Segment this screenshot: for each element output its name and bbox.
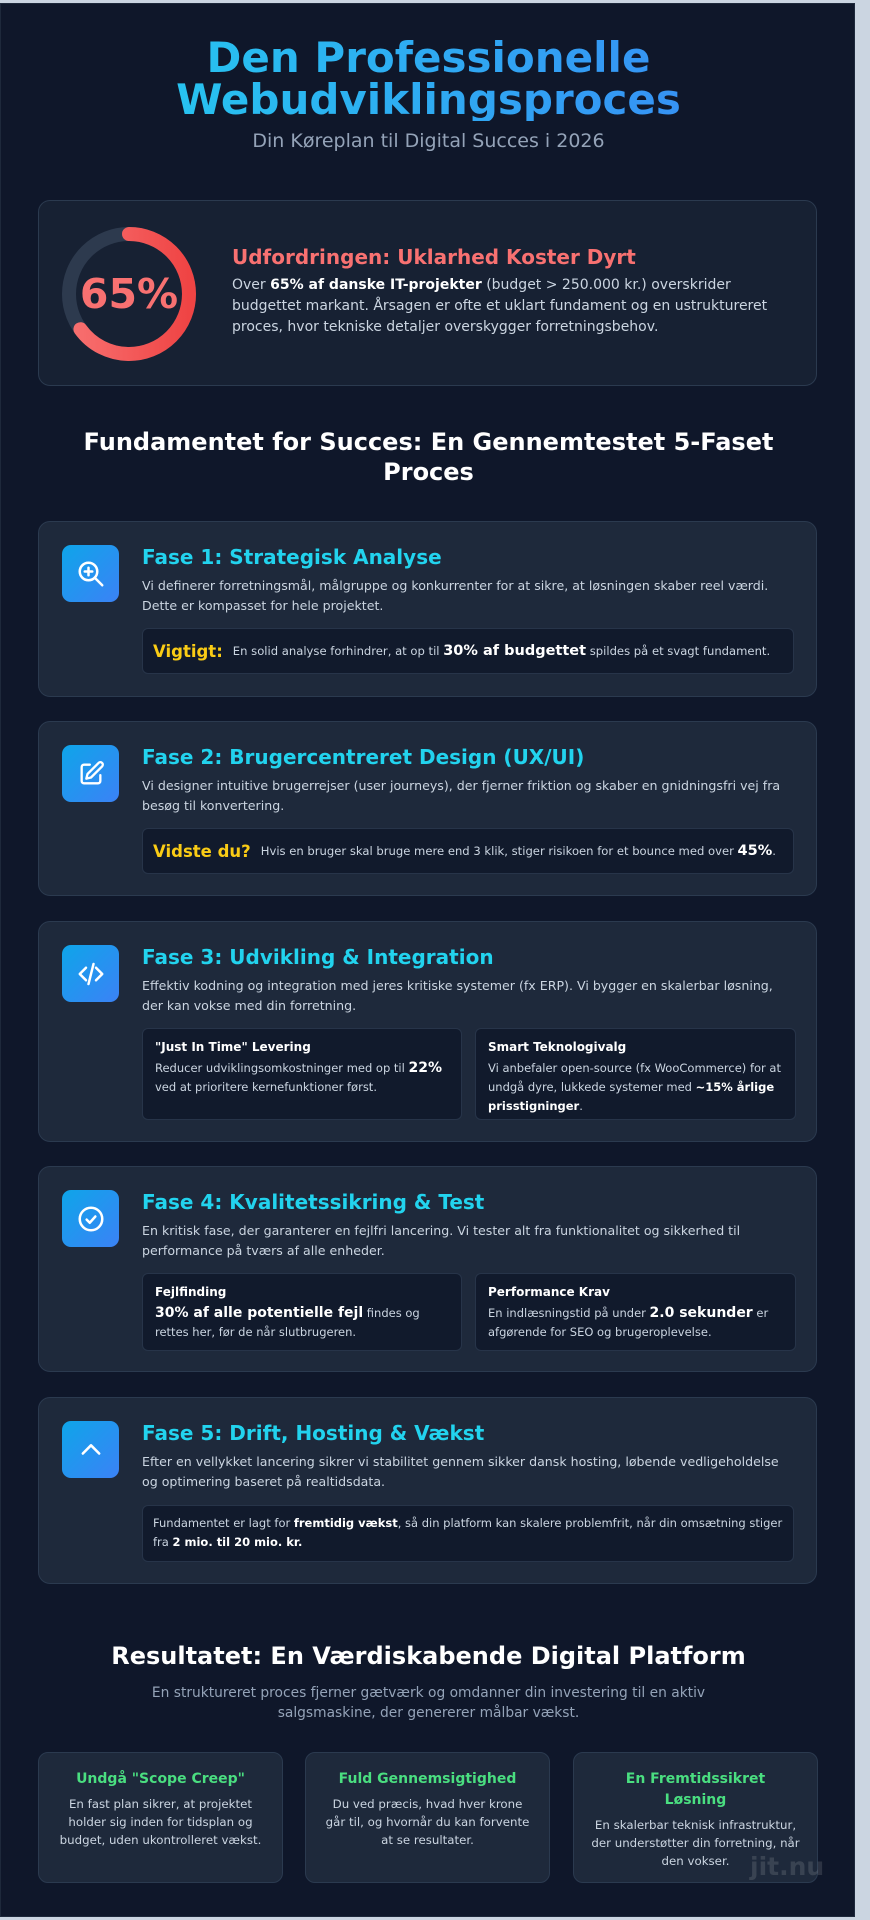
phase 4 text: Fase 4: Kvalitetssikring & Test — [142, 1190, 484, 1214]
icon: check circle — [62, 1190, 119, 1247]
callout: growth: Fundamentet er lagt for fremtidig vækst, så din platform kan skalere problemfrit, når din omsætning stiger fra 2 mio. til 20 mio. kr. — [153, 1516, 782, 1549]
challenge text — [232, 245, 767, 335]
panel: phase 3 — [38, 921, 817, 1142]
result card: fremtidssikret: En Fremtidssikret — [626, 1771, 765, 1787]
title: Webudviklingsproces — [176, 75, 681, 124]
phase 5 text — [142, 1421, 779, 1489]
phase 3 text: Fase 3: Udvikling & Integration — [142, 945, 494, 969]
result card: fremtidssikret: Løsning — [665, 1792, 726, 1808]
result card: fremtidssikret — [573, 1752, 818, 1883]
result card: scope creep — [38, 1752, 283, 1883]
icon: chevron up — [62, 1421, 119, 1478]
result card: scope creep: En fast plan sikrer, at projektet holder sig inden for tidsplan og budget, uden ukontrolleret vækst. — [60, 1797, 261, 1847]
result card: gennemsigtighed: Fuld Gennemsigtighed — [339, 1771, 516, 1787]
phase 2 text — [142, 745, 780, 813]
sub box: fejlfinding — [142, 1273, 462, 1351]
callout: vigtigt: Vigtigt: — [153, 642, 223, 660]
phase 2 text: Fase 2: Brugercentreret Design (UX/UI) — [142, 745, 584, 769]
phase 2 text: Vi designer intuitive brugerrejser (user journeys), der fjerner friktion og skaber en gnidningsfri vej fra besøg til konvertering. — [142, 778, 780, 813]
result intro text: En struktureret proces fjerner gætværk og omdanner din investering til en aktiv salgsmaskine, der genererer målbar vækst. — [152, 1685, 705, 1721]
subtitle: Din Køreplan til Digital Succes i 2026 — [252, 130, 605, 152]
sub box: just in time: Reducer udviklingsomkostninger med op til 22% ved at prioritere kernefunktioner først. — [155, 1060, 442, 1094]
panel: challenge — [38, 200, 817, 386]
callout: vidste du: Hvis en bruger skal bruge mere end 3 klik, stiger risikoen for et bounce med over 45%. — [261, 843, 776, 859]
result card: scope creep: Undgå "Scope Creep" — [76, 1771, 245, 1787]
phase 3 text: Effektiv kodning og integration med jeres kritiske systemer (fx ERP). Vi bygger en skalerbar løsning, der kan vokse med din forretning. — [142, 978, 773, 1013]
sub box: just in time: "Just In Time" Levering — [155, 1040, 311, 1054]
section heading: process — [84, 428, 773, 486]
callout: vigtigt — [142, 628, 794, 674]
result card: gennemsigtighed: Du ved præcis, hvad hver krone går til, og hvornår du kan forvente at se resultater. — [326, 1797, 529, 1847]
phase 1 text — [142, 545, 768, 613]
sub box: performance: En indlæsningstid på under 2.0 sekunder er afgørende for SEO og brugeroplevelse. — [488, 1305, 768, 1339]
challenge text: Udfordringen: Uklarhed Koster Dyrt — [232, 245, 636, 269]
phase 4 text — [142, 1190, 740, 1258]
sub box: smart teknologivalg — [475, 1028, 796, 1120]
watermark: jit.nu — [750, 1852, 824, 1881]
sub box: fejlfinding: Fejlfinding — [155, 1285, 226, 1299]
section heading: process: Proces — [383, 458, 474, 486]
sub box: performance: Performance Krav — [488, 1285, 610, 1299]
phase 5 text: Efter en vellykket lancering sikrer vi stabilitet gennem sikker dansk hosting, løbende vedligeholdelse og optimering baseret på realtidsdata. — [142, 1454, 779, 1489]
phase 3 text — [142, 945, 773, 1013]
icon: magnifier — [62, 545, 119, 602]
panel: phase 1 — [38, 521, 817, 697]
sub box: just in time — [142, 1028, 462, 1120]
title: Den Professionelle — [207, 33, 650, 82]
phase 1 text: Vi definerer forretningsmål, målgruppe og konkurrenter for at sikre, at løsningen skaber reel værdi. Dette er kompasset for hele projektet. — [142, 578, 768, 613]
icon: code — [62, 945, 119, 1002]
sub box: fejlfinding: 30% af alle potentielle fejl findes og rettes her, før de når slutbrugeren. — [155, 1305, 420, 1339]
phase 4 text: En kritisk fase, der garanterer en fejlfri lancering. Vi tester alt fra funktionalitet og sikkerhed til performance på tværs af alle enheder. — [142, 1223, 740, 1258]
section heading: result: Resultatet: En Værdiskabende Digital Platform — [111, 1642, 746, 1670]
phase 1 text: Fase 1: Strategisk Analyse — [142, 545, 442, 569]
result card: fremtidssikret: En skalerbar teknisk infrastruktur, der understøtter din forretning, når den vokser. — [591, 1818, 800, 1868]
callout: vidste du: Vidste du? — [153, 842, 251, 860]
phase 5 text: Fase 5: Drift, Hosting & Vækst — [142, 1421, 484, 1445]
title — [1, 37, 856, 121]
callout: vigtigt: En solid analyse forhindrer, at op til 30% af budgettet spildes på et svagt fundament. — [233, 643, 770, 659]
panel: phase 5 — [38, 1397, 817, 1584]
icon: edit — [62, 745, 119, 802]
panel: phase 4 — [38, 1166, 817, 1372]
callout: growth — [142, 1505, 794, 1562]
challenge text: Over 65% af danske IT-projekter (budget > 250.000 kr.) overskrider budgettet markant. Årsagen er ofte et uklart fundament og en ustruktureret proces, hvor tekniske detaljer overskygger forretningsbehov. — [232, 277, 767, 335]
donut chart: 65%: 65% — [80, 270, 178, 318]
section heading: process: Fundamentet for Succes: En Gennemtestet 5-Faset — [84, 428, 773, 456]
callout: vidste du — [142, 828, 794, 874]
sub box: smart teknologivalg: Vi anbefaler open-source (fx WooCommerce) for at undgå dyre, lukkede systemer med ~15% årlige prisstigninger. — [488, 1061, 781, 1113]
result card: gennemsigtighed — [305, 1752, 550, 1883]
donut chart: 65% — [62, 227, 196, 361]
panel: phase 2 — [38, 721, 817, 896]
sub box: smart teknologivalg: Smart Teknologivalg — [488, 1040, 626, 1054]
sub box: performance — [475, 1273, 796, 1351]
